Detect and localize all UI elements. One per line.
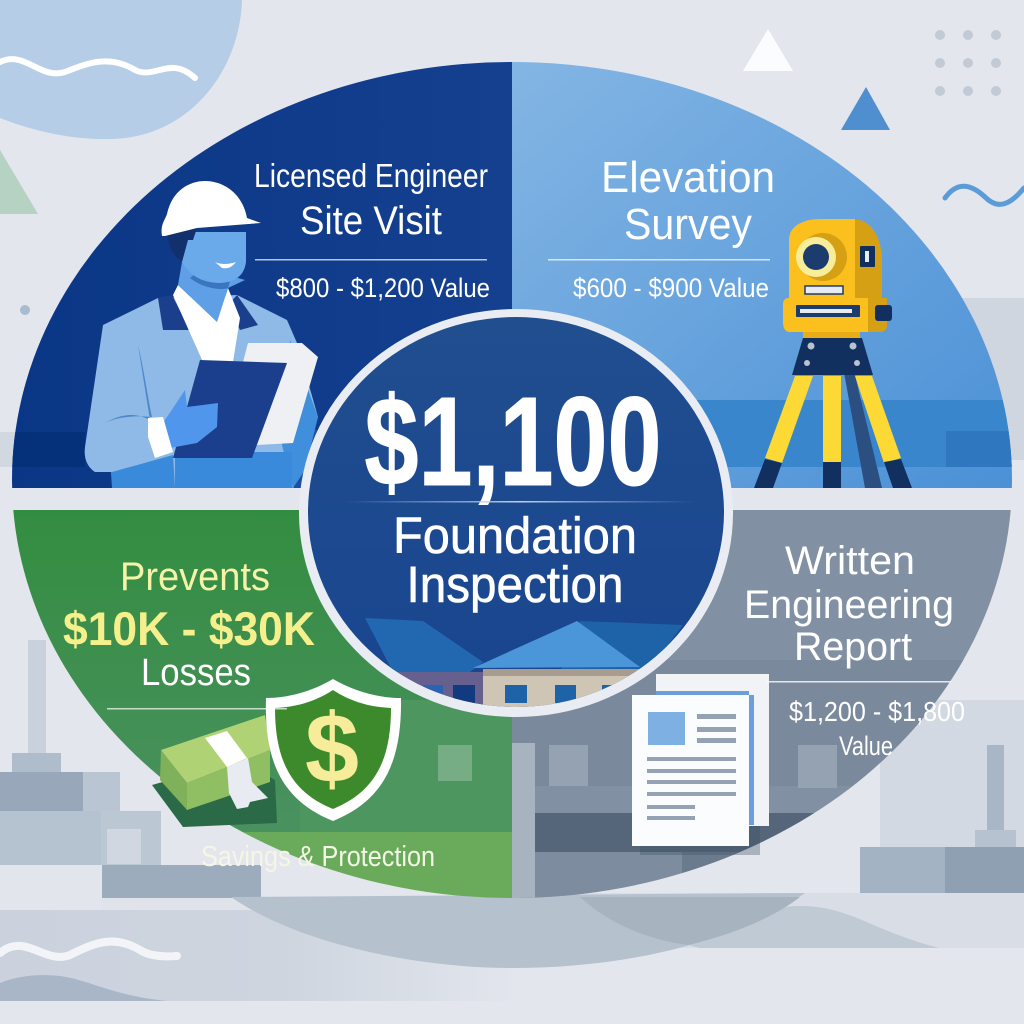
text: prevents losses (63, 555, 435, 873)
icon: report document (632, 674, 769, 855)
central hub (299, 309, 733, 717)
text: prevents losses: Losses (141, 652, 251, 694)
text: site visit: Site Visit (300, 199, 442, 243)
text: written engineering report: Engineering (744, 583, 954, 627)
icon: houses (365, 618, 683, 714)
text: written engineering report: Report (794, 625, 912, 669)
text: written engineering report: Written (785, 539, 915, 583)
hub price: $1,100 (364, 371, 662, 512)
text: prevents losses: $10K - $30K (63, 602, 315, 655)
text: site visit: $800 - $1,200 Value (276, 273, 490, 303)
icon: surveying instrument on tripod (754, 219, 912, 488)
text: elevation survey (548, 153, 775, 303)
icon: cash stack and shield (152, 679, 401, 827)
text: prevents losses: Prevents (120, 555, 270, 599)
text: elevation survey: $600 - $900 Value (573, 273, 769, 303)
text: written engineering report: Value (839, 731, 893, 761)
text: elevation survey: Elevation (601, 153, 775, 202)
text: elevation survey: Survey (624, 200, 752, 249)
icon: cash stack and shield: $ (305, 693, 359, 803)
central hub: Inspection (406, 556, 624, 613)
text: site visit: Licensed Engineer (254, 157, 488, 194)
text: written engineering report (744, 539, 965, 761)
panel: written engineering report (512, 510, 1024, 910)
panel: elevation survey (512, 50, 1024, 488)
text: written engineering report: $1,200 - $1,800 (789, 696, 965, 727)
decorative triangles and dots (20, 29, 1024, 315)
panel: licensed engineer site visit (0, 50, 512, 488)
hub label: Foundation (393, 507, 637, 564)
text: site visit (254, 157, 490, 303)
text: prevents losses: Savings & Protection (201, 841, 435, 873)
panel: prevents losses (0, 510, 512, 902)
icon: engineer (85, 181, 318, 488)
